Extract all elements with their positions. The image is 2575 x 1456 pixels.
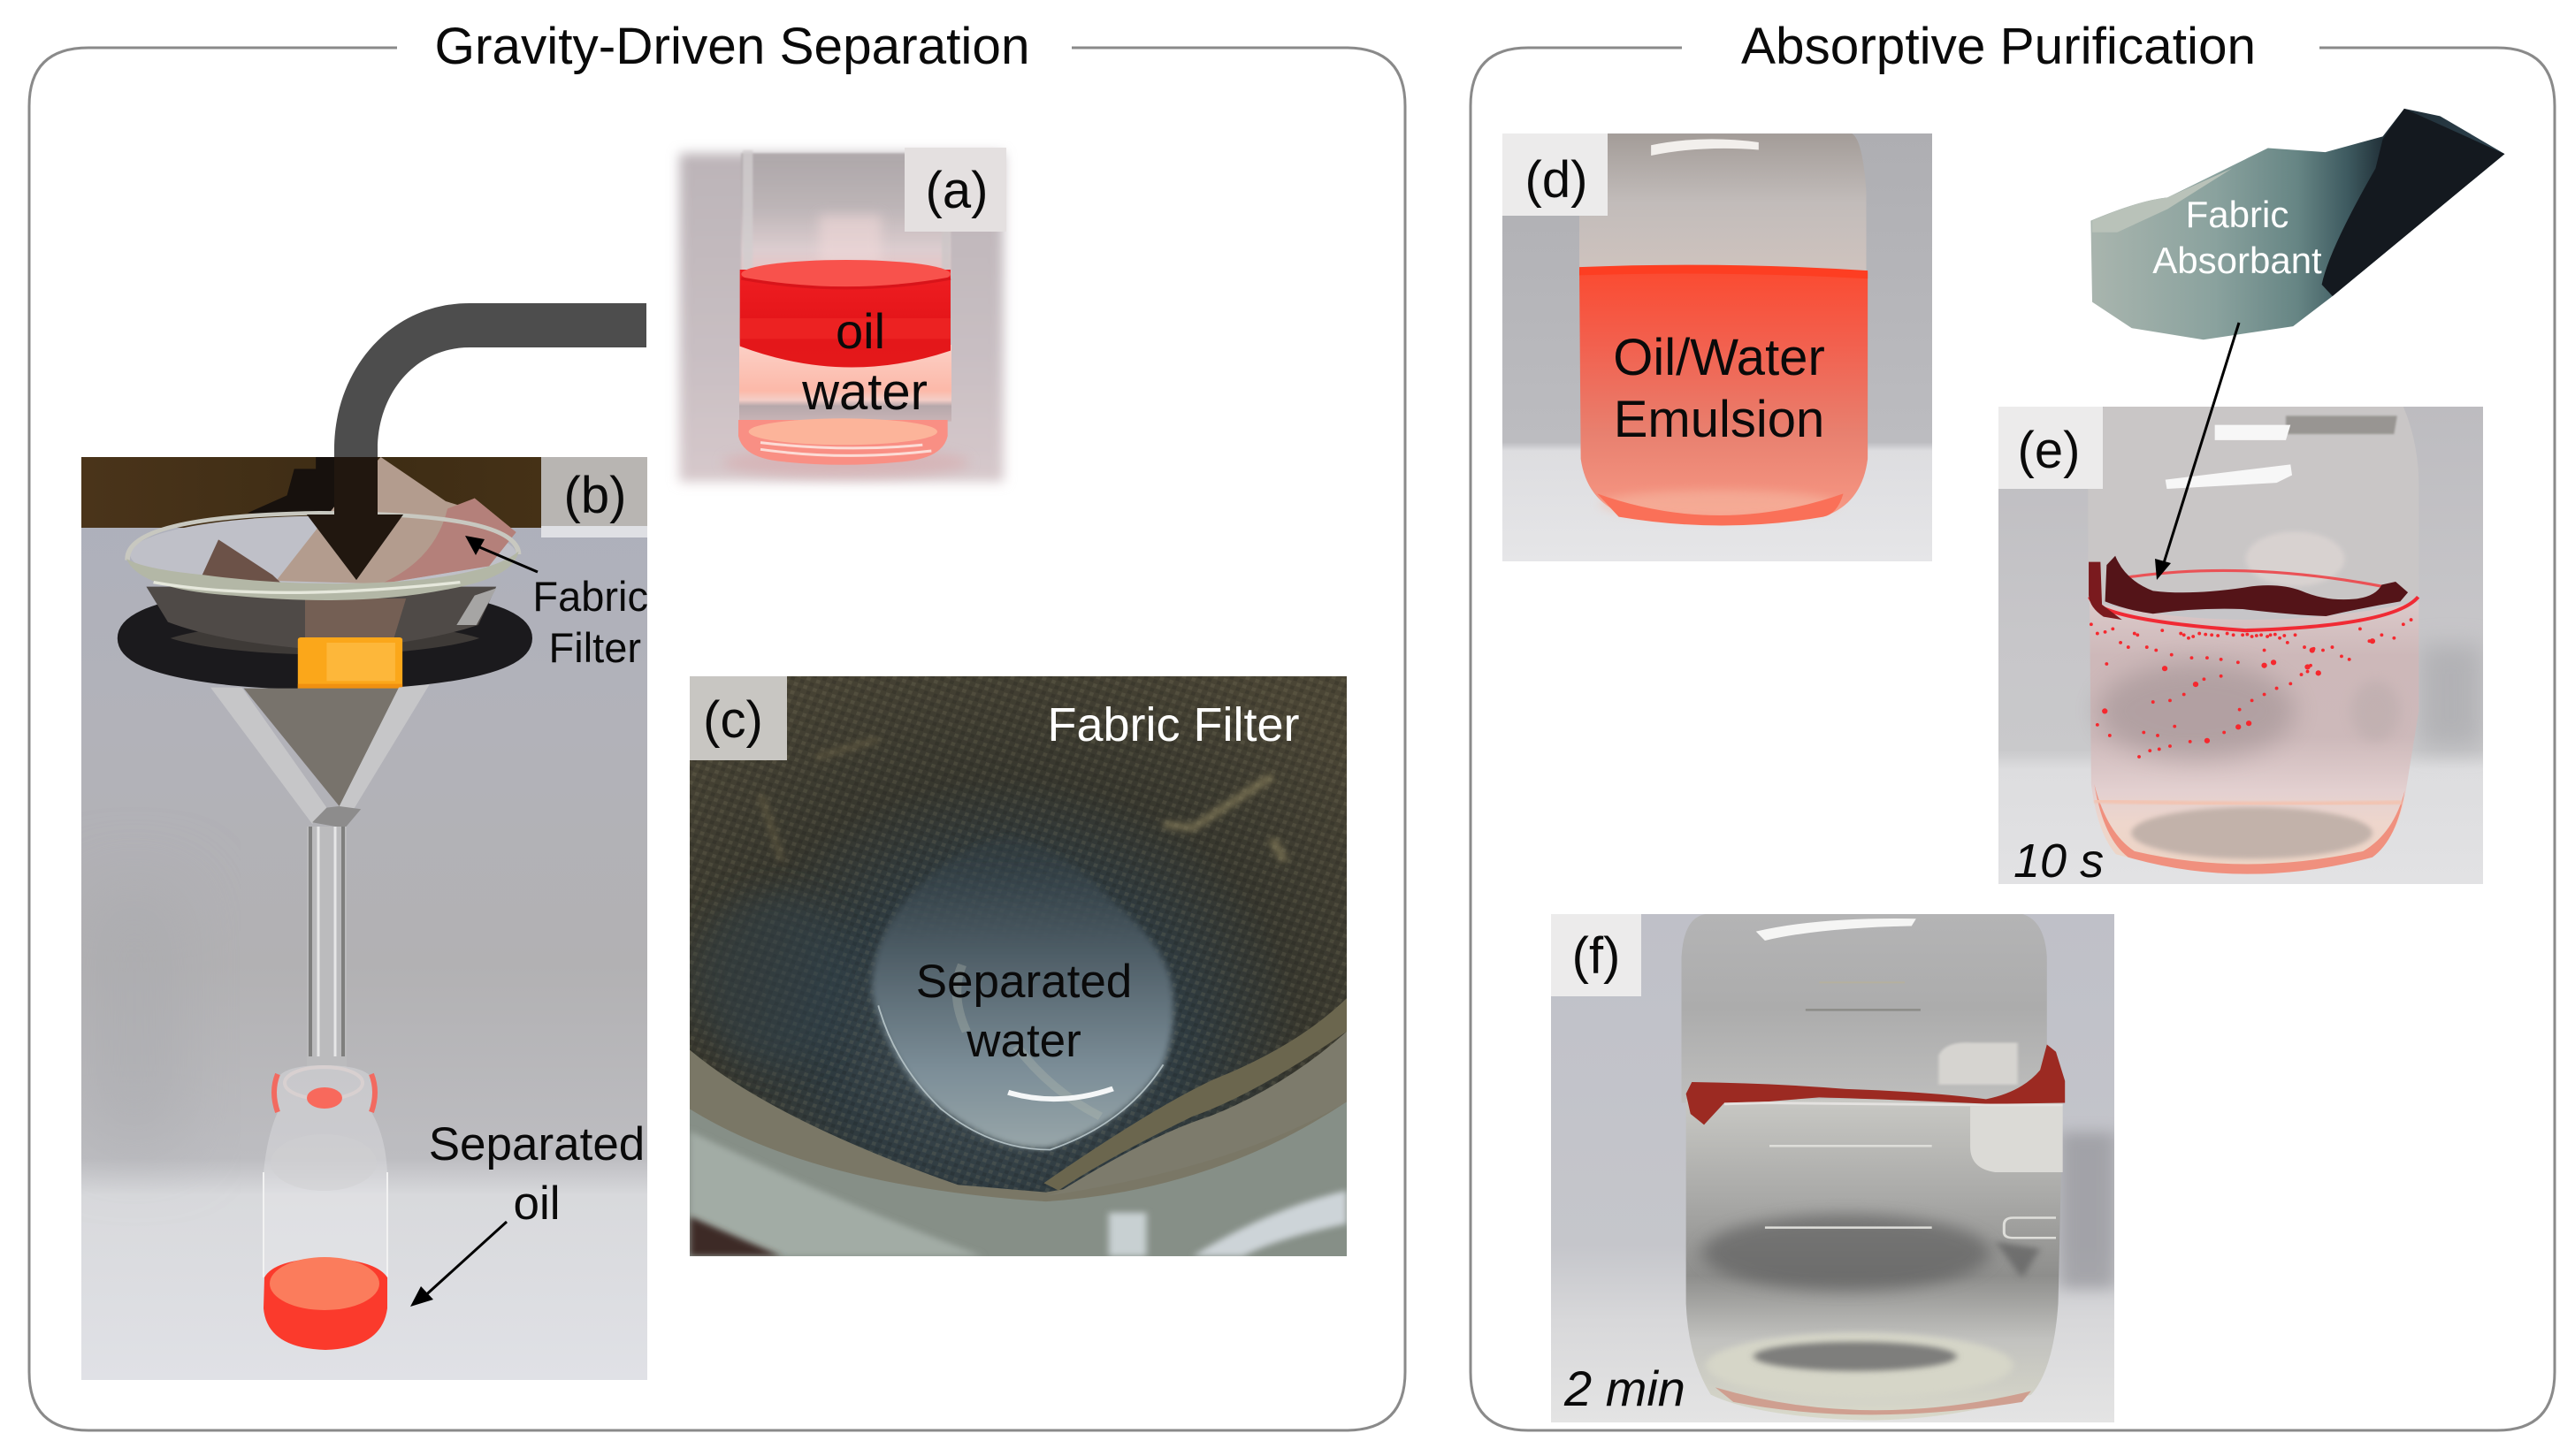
funnel glass and fabric fold xyxy=(690,1050,1347,1202)
photo (e): bottle after 10 s xyxy=(1998,407,2483,884)
photo (c): fabric filter close-up xyxy=(690,676,1347,1256)
photo (f): bottle after 2 min xyxy=(1548,913,2117,1424)
label: 2 min: 2 min xyxy=(1563,1361,1685,1416)
label box (c): (c) xyxy=(703,691,763,749)
lower liquid xyxy=(2090,601,2418,873)
label box (b) xyxy=(541,457,647,537)
red oil meniscus xyxy=(2090,597,2418,630)
label: separated water: Separated xyxy=(916,956,1132,1008)
label: oil water emulsion xyxy=(1613,329,1825,448)
label: separated water xyxy=(916,956,1132,1067)
funnel cone xyxy=(244,689,399,806)
label: fabric filter xyxy=(532,573,648,671)
soaked fabric strip xyxy=(1686,1045,2065,1124)
label: fabric filter: Fabric xyxy=(532,573,648,620)
arrow: fabric absorbant pointer xyxy=(2155,323,2239,580)
panel frame left xyxy=(29,48,1405,1430)
arrow: separated oil pointer xyxy=(410,1222,507,1307)
label: separated oil xyxy=(429,1118,645,1230)
heading: gravity-driven separation: Gravity-Driven Separation xyxy=(434,18,1030,75)
label: water: water xyxy=(801,363,928,421)
label: separated oil: Separated xyxy=(429,1118,645,1170)
trapped water droplet xyxy=(872,835,1173,1148)
label: fabric absorbant xyxy=(2152,194,2322,281)
oil layer xyxy=(740,270,951,367)
glass rim xyxy=(127,513,518,560)
label: oil water emulsion: Oil/Water xyxy=(1613,329,1825,386)
arrow: fabric filter pointer xyxy=(465,536,538,572)
label box (d): (d) xyxy=(1525,151,1587,209)
label: oil: oil xyxy=(836,303,885,359)
photo (a): vial with oil and water xyxy=(679,150,1004,482)
label box (e): (e) xyxy=(2018,422,2080,479)
label: 10 s: 10 s xyxy=(2013,835,2104,888)
label box (f): (f) xyxy=(1572,927,1620,985)
label: fabric absorbant: Absorbant xyxy=(2152,240,2322,281)
panel: absorptive purification xyxy=(1471,18,2555,1430)
label: fabric filter: Filter xyxy=(549,624,641,671)
funnel glass bowl xyxy=(146,587,496,649)
fabric filter xyxy=(202,457,516,585)
black ring stand xyxy=(139,605,511,672)
heading: absorptive purification: Absorptive Purification xyxy=(1741,18,2256,75)
label box (d) xyxy=(1502,133,1608,216)
label box (e) xyxy=(1998,407,2103,489)
red oil droplets xyxy=(2091,620,2411,757)
water layer xyxy=(739,345,951,422)
label: separated oil: oil xyxy=(513,1178,561,1230)
collection vial with separated oil xyxy=(264,1065,387,1350)
label: fabric filter white: Fabric Filter xyxy=(1047,698,1300,751)
soaked fabric band xyxy=(2105,556,2408,616)
label box (c) xyxy=(690,676,787,760)
label: fabric absorbant: Fabric xyxy=(2186,194,2288,235)
photo (d): oil water emulsion bottle xyxy=(1501,131,1935,563)
interior of funnel xyxy=(131,516,516,583)
photo (b): funnel with fabric filter over vial xyxy=(81,457,647,1380)
panel: gravity-driven separation xyxy=(29,18,1405,1430)
upper glass xyxy=(2089,407,2418,497)
fabric absorbant swatch xyxy=(2090,109,2504,339)
funnel stem xyxy=(307,827,347,1070)
big flow arrow from (a) to (b) xyxy=(307,303,646,580)
label box (f) xyxy=(1551,914,1641,996)
vial base xyxy=(738,420,948,465)
orange tape xyxy=(297,637,403,689)
panel frame right xyxy=(1471,48,2555,1430)
label: separated water: water xyxy=(966,1015,1081,1067)
label: oil water emulsion: Emulsion xyxy=(1614,391,1824,448)
label box (a) xyxy=(905,148,1006,232)
label box (a): (a) xyxy=(926,162,988,219)
label box (b): (b) xyxy=(564,467,626,524)
